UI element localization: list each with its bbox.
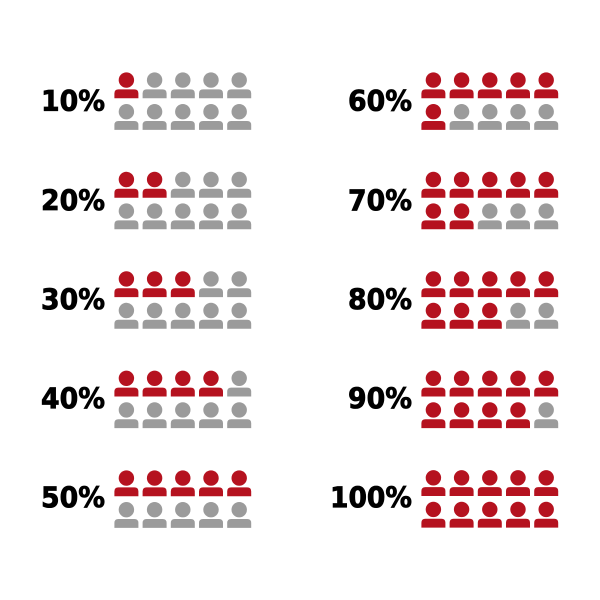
label: 10%: 10%	[41, 85, 105, 118]
panel: 80%	[348, 271, 558, 329]
panel: 10%	[41, 72, 251, 130]
icon grid: 4 of 10 red	[114, 371, 251, 428]
icon grid: 2 of 10 red	[114, 172, 251, 229]
label: 70%: 70%	[348, 184, 412, 217]
label: 80%: 80%	[348, 284, 412, 317]
label: 60%: 60%	[348, 85, 412, 118]
label: 30%: 30%	[41, 284, 105, 317]
label: 100%: 100%	[330, 481, 412, 514]
label: 50%: 50%	[41, 481, 105, 514]
panel: 20%	[41, 172, 251, 229]
icon grid: 8 of 10 red	[421, 271, 558, 329]
panel: 100%	[330, 470, 558, 528]
panel: 40%	[41, 371, 251, 428]
icon grid: 5 of 10 red	[114, 470, 251, 528]
icon grid: 1 of 10 red	[114, 72, 251, 130]
label: 20%: 20%	[41, 184, 105, 217]
panel: 60%	[348, 72, 558, 130]
icon grid: 6 of 10 red	[421, 72, 558, 130]
label: 90%: 90%	[348, 383, 412, 416]
icon grid: 9 of 10 red	[421, 371, 558, 428]
panel: 50%	[41, 470, 251, 528]
icon grid: 10 of 10 red	[421, 470, 558, 528]
panel: 90%	[348, 371, 558, 428]
icon grid: 7 of 10 red	[421, 172, 558, 229]
panel: 30%	[41, 271, 251, 329]
icon grid: 3 of 10 red	[114, 271, 251, 329]
panel: 70%	[348, 172, 558, 229]
label: 40%: 40%	[41, 383, 105, 416]
